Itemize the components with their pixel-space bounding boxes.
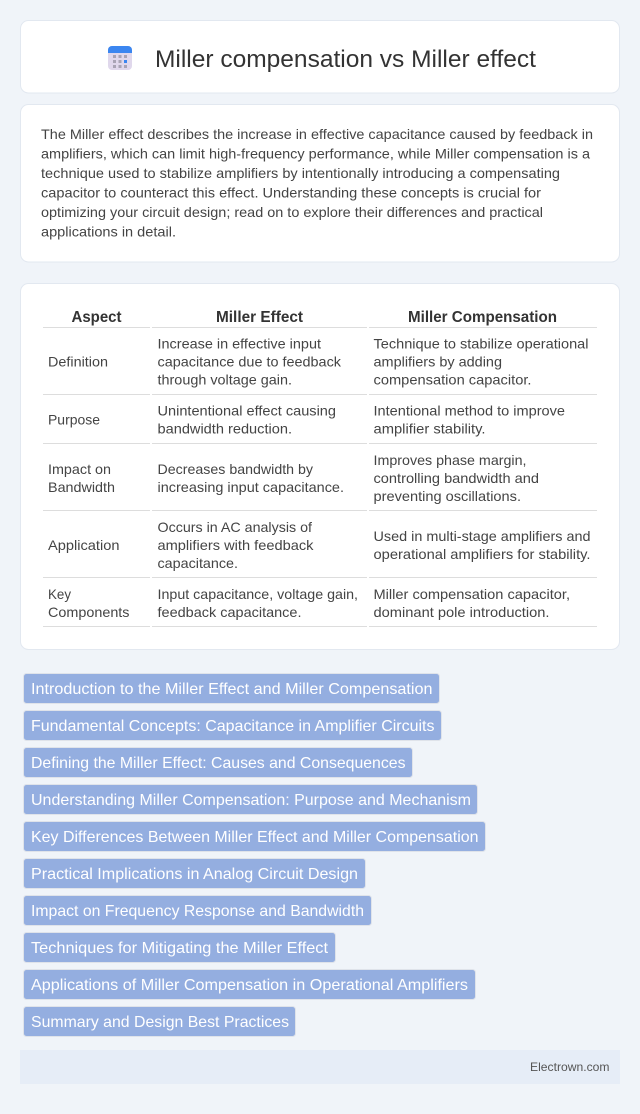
- link: Summary: [24, 1006, 296, 1036]
- link: Defining the Miller Effect: [24, 748, 412, 778]
- link: Introduction: [24, 674, 440, 704]
- text block: introduction paragraph: applications in detail.: [41, 224, 176, 240]
- link: Practical Implications: Practical Implications in Analog Circuit Design: [31, 866, 358, 883]
- link: Summary: Summary and Design Best Practices: [31, 1014, 289, 1031]
- table row: Definition: [43, 336, 597, 395]
- table row: Application: capacitance.: [158, 555, 238, 571]
- table row: Purpose: Unintentional effect causing: [158, 402, 336, 418]
- table row: Definition: capacitance due to feedback: [158, 354, 342, 370]
- table row: Definition: amplifiers by adding: [374, 354, 502, 370]
- text block: introduction paragraph: technique used to stabilize amplifiers by intentionally introducing a compensating: [41, 165, 560, 181]
- table row: Definition: compensation capacitor.: [374, 372, 532, 388]
- table row: Definition: Technique to stabilize operational: [374, 336, 588, 352]
- text block: introduction paragraph: capacitor to counteract this effect. Understanding these concepts is crucial for: [41, 184, 541, 200]
- table row: Impact on Bandwidth: Improves phase margin,: [374, 452, 526, 468]
- table row: Impact on Bandwidth: preventing oscillations.: [374, 488, 521, 504]
- link: Defining the Miller Effect: Defining the Miller Effect: Causes and Consequences: [31, 755, 406, 772]
- link: Introduction: Introduction to the Miller Effect and Miller Compensation: [31, 681, 432, 698]
- link: Practical Implications: [24, 858, 366, 888]
- link: Impact on Frequency Response: Impact on Frequency Response and Bandwidth: [31, 903, 364, 920]
- panel: comparison table: [20, 284, 620, 650]
- panel: introduction: [20, 104, 620, 262]
- text block: introduction paragraph: [41, 126, 593, 240]
- footer: Electrown.com: [530, 1060, 610, 1074]
- link: Fundamental Concepts: Fundamental Concepts: Capacitance in Amplifier Circuits: [31, 718, 434, 735]
- table row: Impact on Bandwidth: Bandwidth: [48, 479, 115, 495]
- text block: introduction paragraph: amplifiers, which can limit high-frequency performance, while Miller compensation is a: [41, 146, 590, 162]
- table row: Key Components: Components: [48, 604, 130, 620]
- table row: Key Components: feedback capacitance.: [158, 604, 302, 620]
- link: Techniques for Mitigating: Techniques for Mitigating the Miller Effect: [31, 940, 329, 957]
- table header row: [43, 309, 597, 328]
- table row: Key Components: Input capacitance, voltage gain,: [158, 586, 358, 602]
- table row: Purpose: bandwidth reduction.: [158, 420, 292, 436]
- section links list: [24, 674, 486, 1036]
- table row: Application: Application: [48, 537, 120, 553]
- title: Miller compensation vs Miller effect: [155, 46, 536, 73]
- link: Understanding Miller Compensation: [24, 784, 478, 814]
- table row: Definition: through voltage gain.: [158, 372, 292, 388]
- footer: [20, 1050, 620, 1084]
- text block: introduction paragraph: The Miller effect describes the increase in effective capacitance caused by feedback in: [41, 126, 593, 142]
- table row: Impact on Bandwidth: Impact on: [48, 461, 111, 477]
- link: Techniques for Mitigating: [24, 932, 336, 962]
- table row: Impact on Bandwidth: controlling bandwidth and: [374, 470, 539, 486]
- table row: Definition: Increase in effective input: [158, 336, 321, 352]
- panel: title card: [20, 20, 620, 93]
- link: Applications of Miller Compensation: Applications of Miller Compensation in Operational Amplifiers: [31, 977, 468, 994]
- table header row: Miller Compensation: [408, 309, 557, 326]
- link: Key Differences: Key Differences Between Miller Effect and Miller Compensation: [31, 829, 478, 846]
- icon: calendar: [108, 46, 132, 70]
- text block: introduction paragraph: optimizing your circuit design; read on to explore their differences and practical: [41, 204, 543, 220]
- table header row: Miller Effect: [216, 309, 304, 326]
- table row: Impact on Bandwidth: increasing input capacitance.: [158, 479, 344, 495]
- link: Fundamental Concepts: [24, 710, 442, 740]
- table row: Purpose: amplifier stability.: [374, 420, 486, 436]
- table row: Key Components: dominant pole introduction.: [374, 604, 550, 620]
- link: Key Differences: [24, 822, 486, 852]
- table row: Definition: Definition: [48, 354, 108, 370]
- link: Understanding Miller Compensation: Understanding Miller Compensation: Purpose and Mechanism: [31, 792, 471, 809]
- table row: Application: operational amplifiers for stability.: [374, 546, 590, 562]
- table row: Purpose: Purpose: [48, 412, 100, 428]
- table row: Purpose: [43, 402, 597, 444]
- table row: Application: amplifiers with feedback: [158, 537, 315, 553]
- table row: Purpose: Intentional method to improve: [374, 402, 565, 418]
- link: Impact on Frequency Response: [24, 896, 372, 926]
- table row: Application: Occurs in AC analysis of: [158, 519, 312, 535]
- table row: Impact on Bandwidth: Decreases bandwidth by: [158, 461, 313, 477]
- table row: Key Components: Key: [48, 586, 71, 602]
- table row: Impact on Bandwidth: [43, 452, 597, 511]
- table row: Key Components: Miller compensation capacitor,: [374, 586, 570, 602]
- table row: Application: Used in multi-stage amplifiers and: [374, 528, 590, 544]
- table row: Application: [43, 519, 597, 578]
- table header row: Aspect: [72, 309, 122, 326]
- link: Applications of Miller Compensation: [24, 970, 476, 1000]
- table row: Key Components: [43, 586, 597, 627]
